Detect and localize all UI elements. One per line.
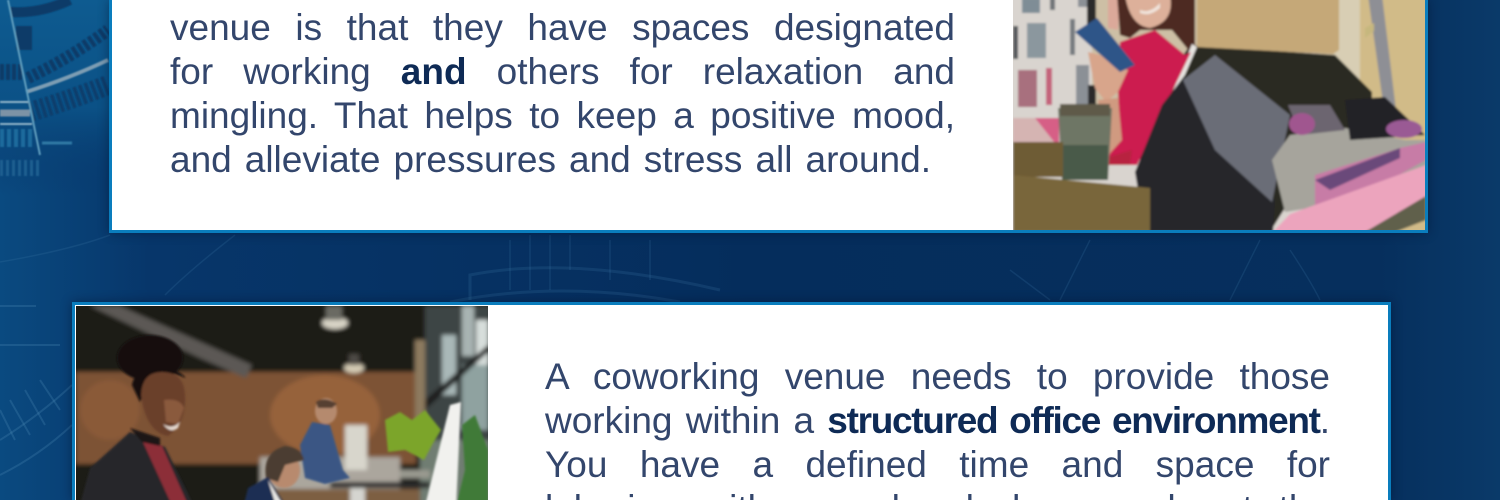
text block: spaces for working and relaxing: and alleviate pressures and stress all around.	[170, 139, 931, 180]
cardboard boxes	[1013, 142, 1063, 177]
jacket	[78, 432, 197, 500]
sneaker	[1272, 128, 1426, 212]
text block: structured office environment: working within a structured office environment.	[545, 400, 1330, 441]
standing man	[315, 398, 337, 424]
text block: structured office environment	[545, 356, 1330, 500]
hair	[1108, 0, 1120, 30]
plants	[385, 410, 441, 460]
cup	[1058, 108, 1112, 180]
panel: bottom card	[72, 302, 1391, 500]
shirt	[1105, 30, 1191, 165]
text block: spaces for working and relaxing: venue is that they have spaces designated	[170, 7, 955, 48]
text block: spaces for working and relaxing: mingling. That helps to keep a positive mood,	[170, 95, 955, 136]
photo: woman with laptop and phone	[1013, 0, 1425, 230]
laptop	[1197, 0, 1339, 54]
face	[141, 372, 185, 436]
seated man	[268, 452, 300, 488]
phone	[1075, 18, 1135, 72]
text block: spaces for working and relaxing: for working and others for relaxation and	[170, 51, 955, 92]
text block: spaces for working and relaxing	[170, 7, 955, 180]
photo: woman in open-plan office	[76, 306, 488, 500]
text block: structured office environment: You have a defined time and space for	[545, 444, 1330, 485]
chair	[1140, 45, 1372, 232]
hair	[117, 335, 183, 381]
panel: top card	[109, 0, 1428, 233]
text block: structured office environment: A coworking venue needs to provide those	[545, 356, 1330, 397]
legs	[1135, 75, 1275, 232]
arm and hand	[1088, 52, 1128, 102]
